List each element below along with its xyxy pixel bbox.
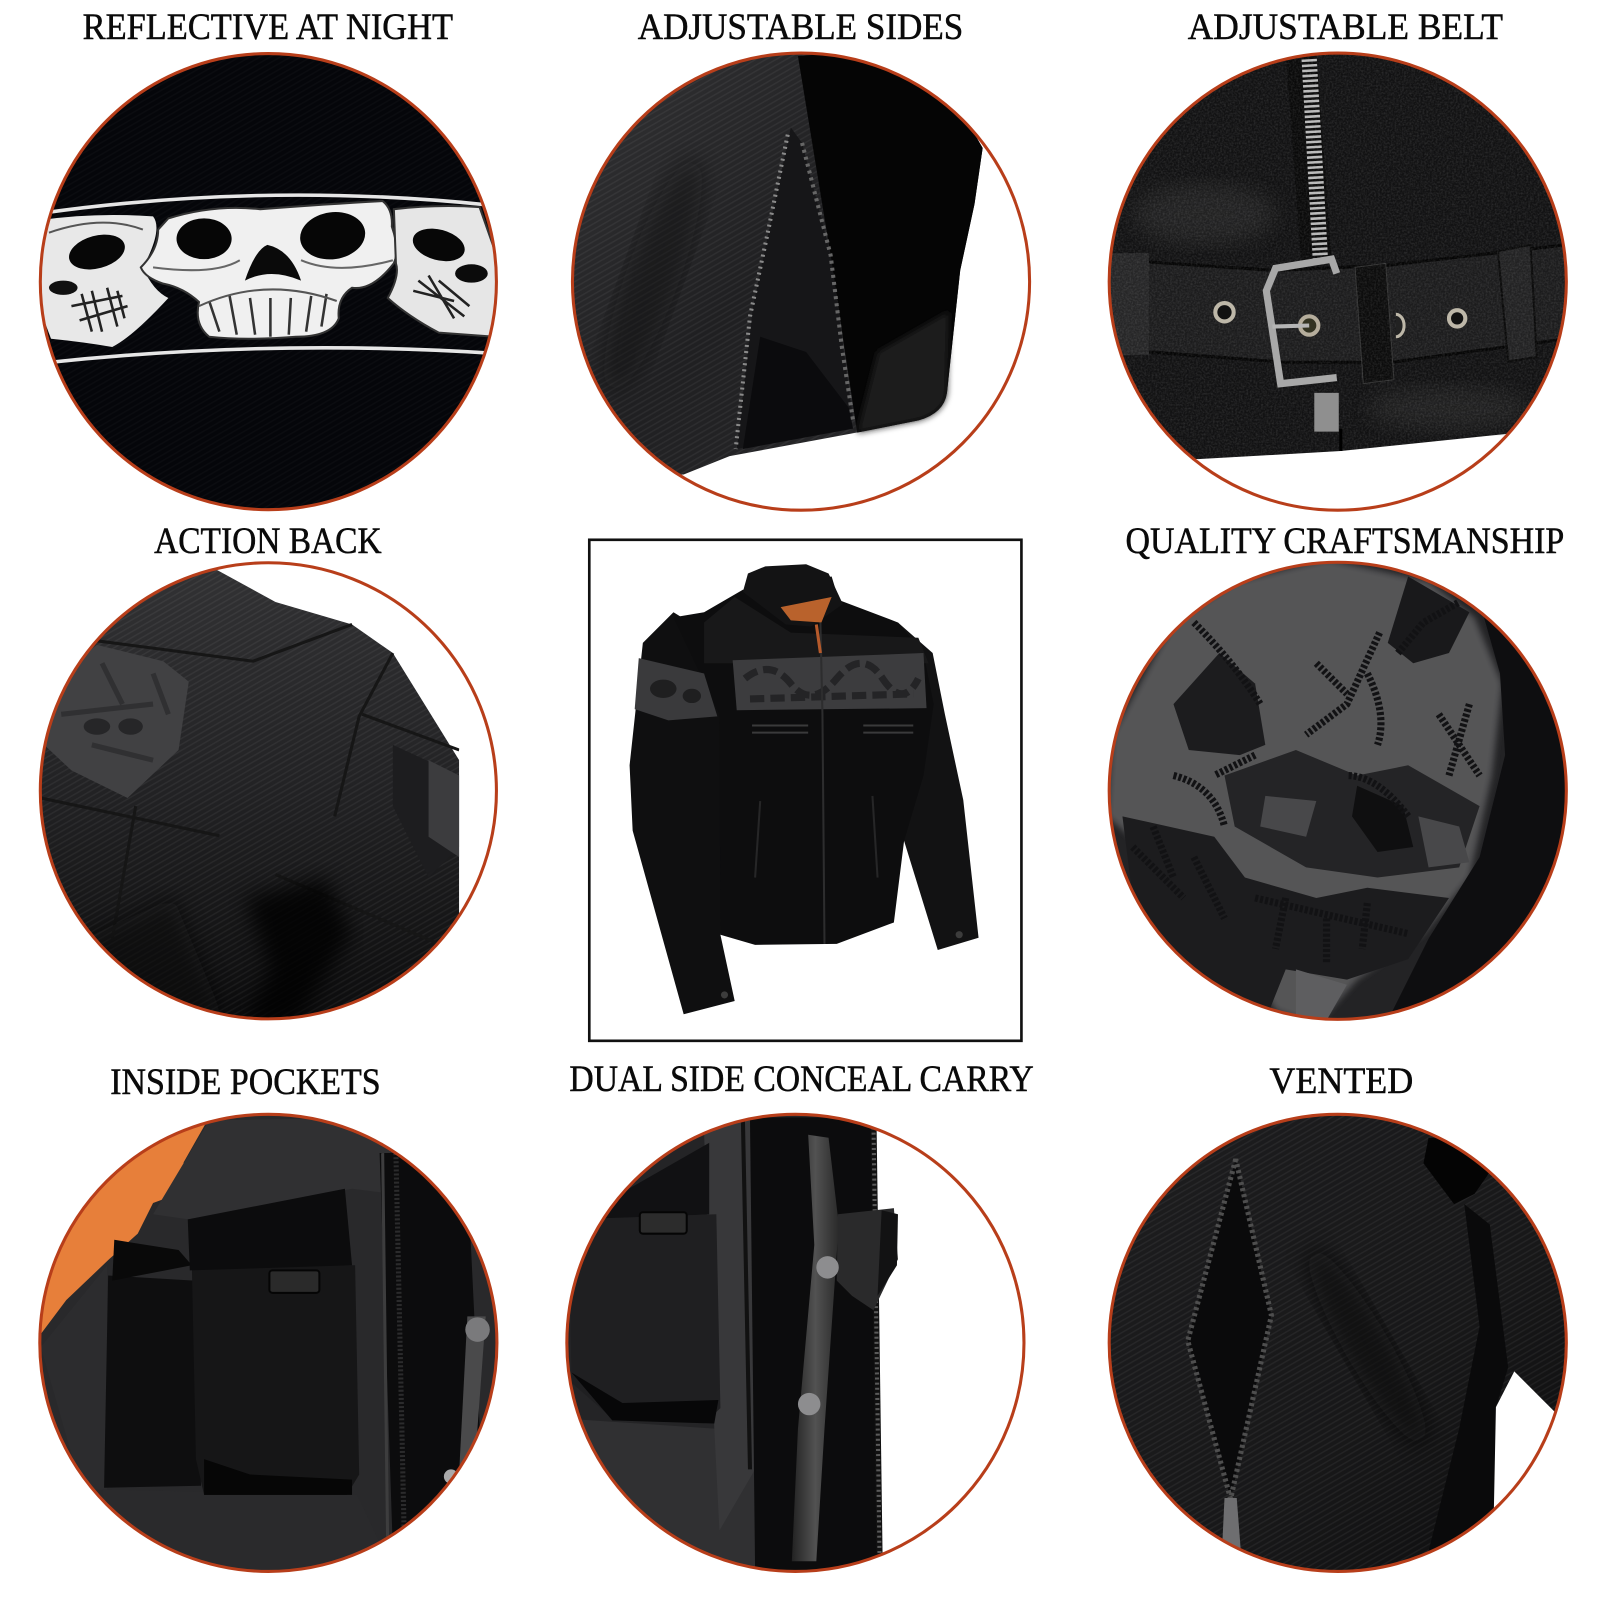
left pouch — [104, 1276, 201, 1488]
black fabric right — [1392, 618, 1565, 1011]
seams — [41, 624, 459, 944]
ring — [1109, 562, 1566, 1019]
gusset — [737, 128, 853, 449]
collar — [743, 564, 843, 627]
ring — [572, 53, 1030, 510]
gray patch — [1107, 559, 1502, 1026]
main pocket — [192, 1265, 359, 1495]
photo: zip vent on jacket side — [1102, 1107, 1571, 1592]
vent opening — [1188, 1159, 1271, 1499]
skull eye — [1173, 653, 1265, 755]
snap — [465, 1317, 490, 1342]
panel: reflective at night — [31, 6, 510, 515]
ring — [1109, 53, 1566, 510]
photo: concealed holster and gun grip — [561, 1107, 1031, 1582]
buckle — [1266, 259, 1337, 384]
pocket — [569, 1214, 720, 1423]
center skull — [141, 201, 397, 339]
ring — [40, 54, 496, 510]
ring — [567, 1114, 1024, 1571]
heading: action back: ACTION BACK — [154, 520, 382, 561]
elastic strap — [112, 1240, 190, 1277]
photo: inside pockets and orange lining — [31, 1107, 510, 1582]
skull band — [733, 653, 927, 710]
heading: adjustable sides: ADJUSTABLE SIDES — [638, 6, 963, 47]
zipper pull — [1222, 1498, 1241, 1551]
panel: inside pockets — [31, 1061, 510, 1582]
panel: dual side conceal carry — [561, 1058, 1034, 1582]
shading — [1292, 1239, 1443, 1455]
pocket flap — [188, 1189, 352, 1270]
left sleeve — [630, 612, 740, 1014]
grommets — [1215, 303, 1234, 321]
gun grip — [837, 1208, 898, 1310]
armpit shadow — [240, 878, 352, 1026]
jacket illustration — [630, 564, 979, 1014]
photo: reflective skull band on black fabric — [31, 46, 510, 515]
heading: quality craftsmanship: QUALITY CRAFTSMANSHIP — [1126, 520, 1564, 561]
right skull — [388, 206, 500, 337]
zipper — [1301, 51, 1316, 260]
panel: adjustable sides — [566, 6, 1036, 515]
photo: leather belt and buckle — [1110, 54, 1565, 460]
heading: vented: VENTED — [1269, 1060, 1413, 1101]
panel: jacket product photo — [589, 540, 1021, 1041]
cuff snaps — [721, 991, 728, 998]
front zipper — [873, 1122, 880, 1561]
lining — [561, 1418, 755, 1582]
side pocket — [755, 796, 878, 878]
belt strap — [1112, 245, 1566, 362]
leather grain — [1102, 46, 1571, 459]
white gap — [1429, 1371, 1571, 1592]
photo: side zipper gusset — [574, 54, 983, 475]
heading: reflective at night: REFLECTIVE AT NIGHT — [83, 6, 453, 47]
belt loops — [1355, 263, 1394, 384]
mesh panel — [750, 1117, 882, 1571]
chest pockets — [752, 726, 913, 733]
left skull — [39, 215, 168, 347]
heading: adjustable belt: ADJUSTABLE BELT — [1188, 6, 1503, 47]
orange lining — [42, 1124, 205, 1333]
heading: dual side conceal carry: DUAL SIDE CONCEAL CARRY — [569, 1058, 1034, 1099]
black lining folds — [162, 1162, 184, 1200]
right dark panel — [798, 46, 983, 433]
heading: inside pockets: INSIDE POCKETS — [110, 1061, 381, 1102]
sleeve skull band — [635, 658, 717, 720]
pocket flap — [566, 1143, 709, 1224]
skull patch — [39, 645, 189, 798]
frame — [589, 540, 1021, 1041]
zipper pull — [1314, 393, 1339, 432]
panel: adjustable belt — [1102, 6, 1571, 515]
pull tab — [640, 1212, 687, 1234]
front strip and zipper — [380, 1153, 485, 1551]
panel: vented — [1102, 1060, 1571, 1592]
zippers — [736, 135, 788, 449]
ring — [40, 563, 496, 1019]
embroidery stitches — [1133, 602, 1480, 964]
second patch — [393, 745, 459, 878]
photo: skull embroidery close-up — [1102, 556, 1571, 1026]
right sleeve — [888, 622, 979, 950]
panel: action back — [31, 520, 510, 1026]
snaps — [816, 1256, 839, 1279]
ring — [40, 1114, 497, 1571]
dark fold — [1423, 1138, 1510, 1204]
ring — [1109, 1114, 1566, 1571]
photo: shoulder gusset with skull patches — [42, 570, 460, 1018]
panel: quality craftsmanship — [1102, 520, 1571, 1026]
lower teeth embroidery — [1122, 816, 1449, 1020]
snap strap — [457, 1316, 486, 1510]
body — [673, 577, 934, 945]
strap — [792, 1135, 839, 1561]
zipper — [820, 622, 824, 944]
white cutout right — [459, 748, 460, 913]
pull tab — [269, 1270, 319, 1293]
